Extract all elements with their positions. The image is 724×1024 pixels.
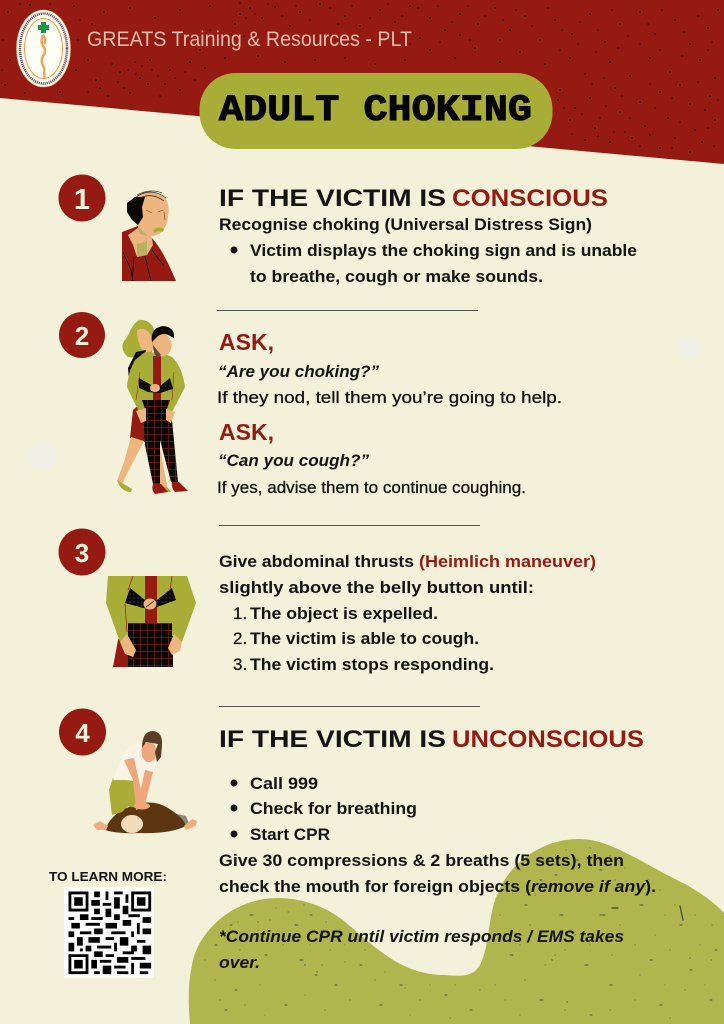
step 4 CPR instructions <box>219 851 656 896</box>
step 2 text: If they nod, tell them you’re going to help. <box>217 388 562 407</box>
step 3 text: Give abdominal thrusts <box>219 552 414 571</box>
step 1 text: to breathe, cough or make sounds. <box>250 267 543 286</box>
step 2 text: ASK, <box>219 419 274 445</box>
step 3 text: 3. <box>233 655 247 674</box>
continue CPR note: *Continue CPR until victim responds / EMS takes <box>219 927 624 946</box>
title pill: ADULT CHOKING <box>219 90 532 132</box>
step 1 heading <box>219 185 608 212</box>
step 1 badge: 1 <box>74 184 90 216</box>
step 1 badge <box>58 174 106 222</box>
step 3 text <box>219 552 596 674</box>
step 2 text <box>217 329 562 497</box>
step 3 illustration: hand placement close-up <box>106 576 196 667</box>
step 3 text: slightly above the belly button until: <box>219 578 534 597</box>
step 2 text: If yes, advise them to continue coughing. <box>217 478 526 497</box>
organisation name: GREATS Training & Resources - PLT <box>87 28 412 51</box>
step 4 heading <box>219 726 644 753</box>
step 4 bullet list: Check for breathing <box>250 799 417 818</box>
step 4 bullet list: Call 999 <box>250 774 318 793</box>
learn more label: TO LEARN MORE: <box>49 869 167 884</box>
step 3 text: The victim stops responding. <box>250 655 494 674</box>
title pill <box>200 73 552 149</box>
step 4 badge: 4 <box>75 718 90 748</box>
continue CPR note: over. <box>219 953 260 972</box>
step 1 heading: IF THE VICTIM IS <box>219 185 446 212</box>
step 4 illustration: CPR on patient <box>93 731 197 833</box>
step 1 heading: CONSCIOUS <box>452 185 608 212</box>
step 1 illustration: man clutching throat <box>122 191 176 281</box>
step 1 text <box>219 215 637 286</box>
decorative pale circles <box>28 337 701 471</box>
step 3 text: 1. <box>233 604 247 623</box>
step 2 badge <box>59 312 105 358</box>
step 2 badge: 2 <box>75 321 89 351</box>
step 2 text: “Can you cough?” <box>218 451 369 470</box>
step 1 text: Recognise choking (Universal Distress Sign) <box>219 215 592 234</box>
step 4 badge <box>59 708 106 756</box>
step 2 text: ASK, <box>219 329 274 355</box>
step 4 CPR instructions: check the mouth for foreign objects ( remove if any ). <box>219 877 656 896</box>
logo badge <box>16 10 70 87</box>
header red banner <box>0 0 724 164</box>
step 4 heading: IF THE VICTIM IS <box>219 726 446 753</box>
continue CPR note <box>219 927 624 972</box>
step 3 badge: 3 <box>75 538 89 568</box>
step 3 text: The object is expelled. <box>250 604 438 623</box>
step 1 text: Victim displays the choking sign and is unable <box>250 241 637 260</box>
step 4 bullet list <box>230 774 417 844</box>
step 4 bullet list: Start CPR <box>250 825 330 844</box>
step 3 text: 2. <box>233 629 247 648</box>
QR code <box>64 887 154 978</box>
step 3 text: The victim is able to cough. <box>250 629 479 648</box>
step 4 heading: UNCONSCIOUS <box>452 726 644 753</box>
step 2 text: “Are you choking?” <box>218 362 379 381</box>
step 4 CPR instructions: Give 30 compressions & 2 breaths (5 sets), then <box>219 851 624 870</box>
step 2 illustration: rescuer behind victim <box>117 320 188 494</box>
green speckled blob <box>189 839 724 1024</box>
step 3 badge <box>58 528 106 576</box>
step 3 text: (Heimlich maneuver) <box>419 552 596 571</box>
